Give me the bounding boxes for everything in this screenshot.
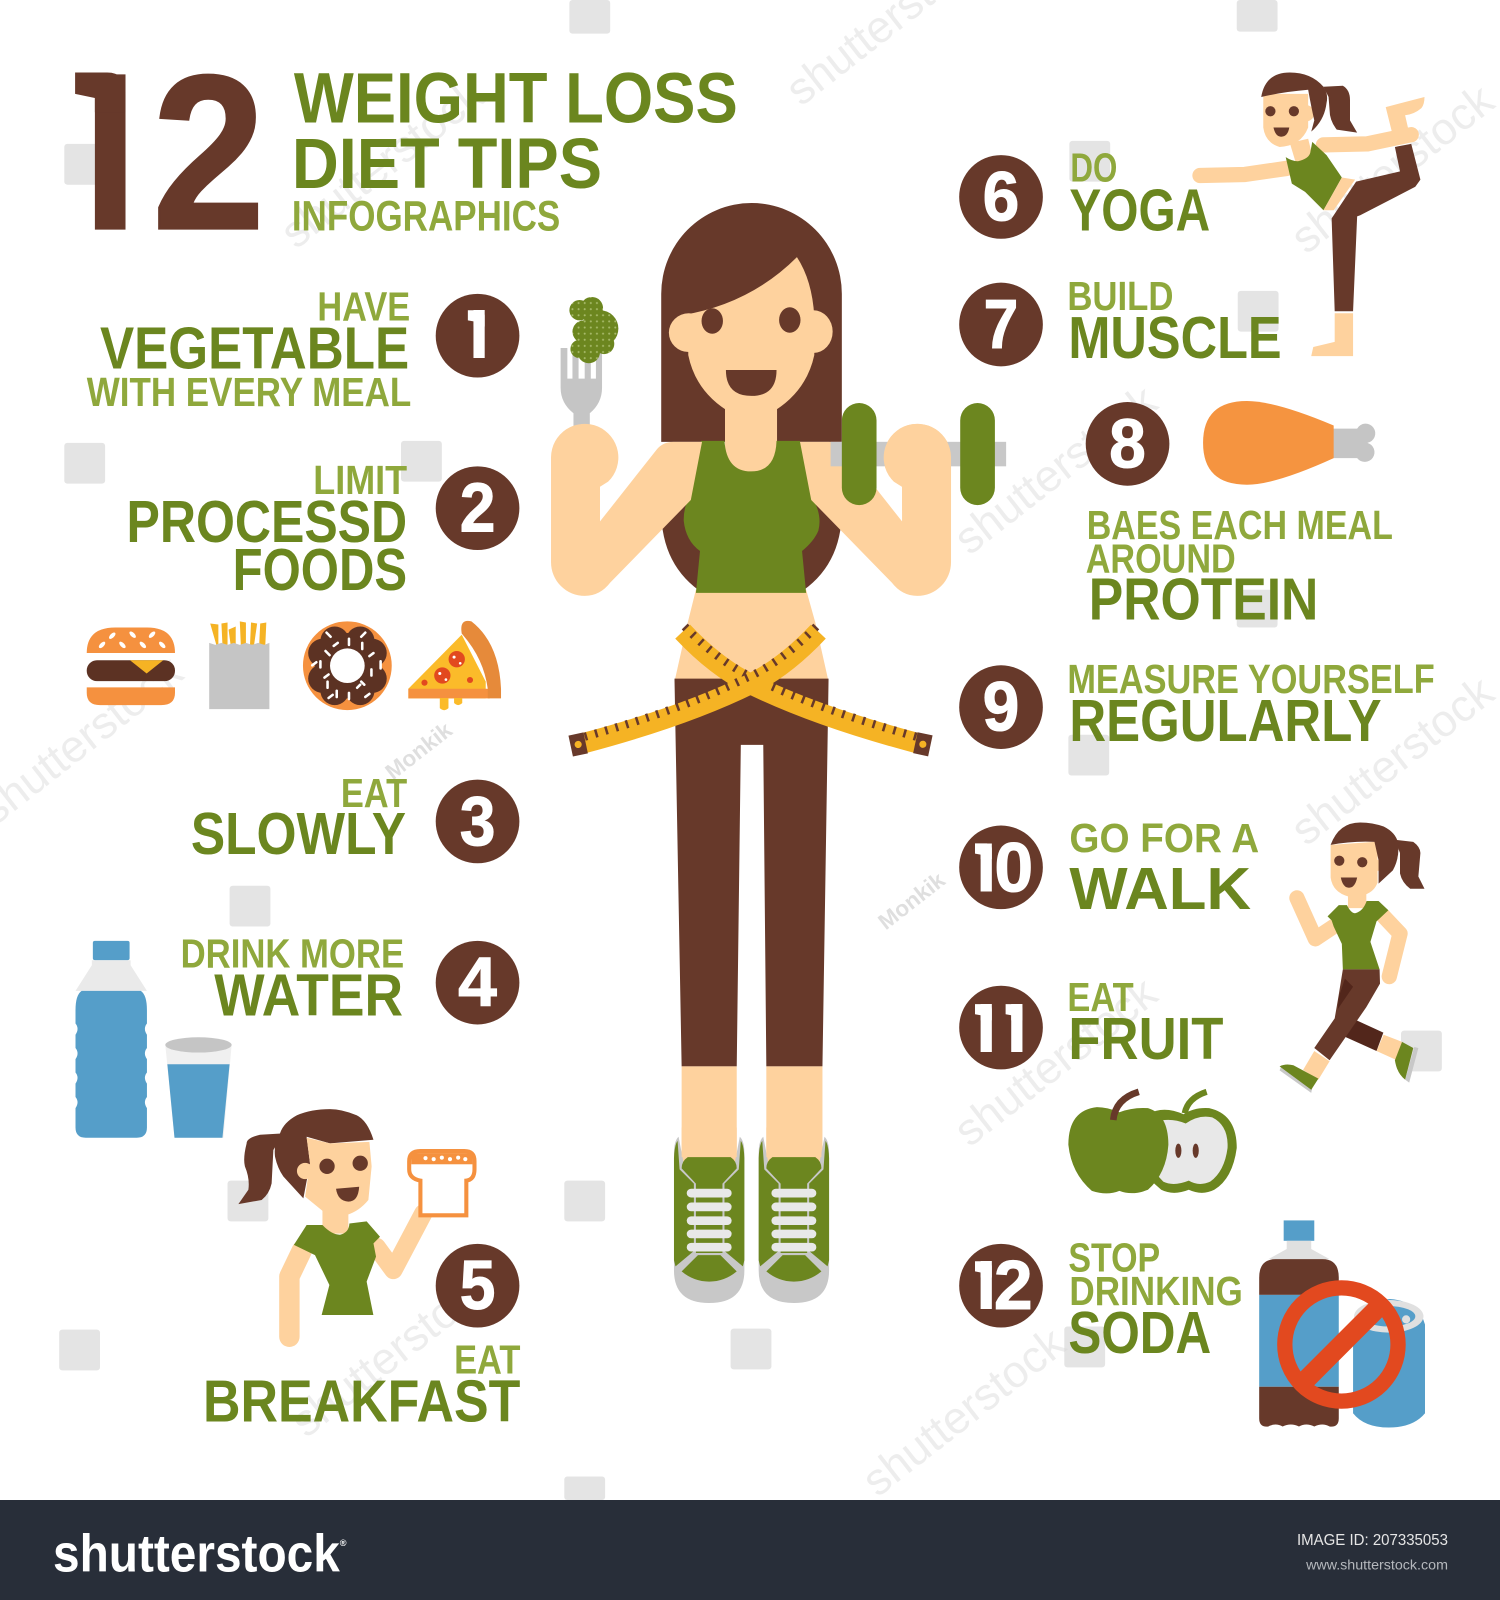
tip 1: have vegetable: HAVE <box>317 283 410 329</box>
left shoe <box>674 1128 744 1303</box>
right shoe <box>759 1128 829 1303</box>
icon: apples <box>1068 1092 1237 1193</box>
face <box>669 257 833 416</box>
tip 5: eat breakfast <box>203 1244 520 1434</box>
left arm <box>551 424 702 596</box>
icon: soda bottle and can <box>1259 1220 1425 1428</box>
tip 1: have vegetable: VEGETABLE <box>100 314 409 381</box>
tip 10: go for a walk: 1 <box>958 828 1010 906</box>
tip 3: eat slowly: 3 <box>460 782 495 860</box>
crop top <box>684 441 820 593</box>
tip 5: eat breakfast: EAT <box>454 1336 520 1382</box>
tip 11: eat fruit: 1 <box>989 989 1041 1067</box>
tip 10: go for a walk: WALK <box>1069 855 1251 922</box>
text: shutterstock <box>852 1316 1075 1506</box>
text: shutterstock <box>1281 74 1500 263</box>
title <box>75 72 736 231</box>
tip 2: limit processed foods: 2 <box>460 469 495 547</box>
dumbbell weights <box>842 403 995 505</box>
tip 3: eat slowly <box>191 770 519 867</box>
fork <box>561 348 602 429</box>
tip 11: eat fruit: 1 <box>958 989 1010 1067</box>
icon: donut <box>303 621 392 710</box>
icon: burger <box>87 628 175 705</box>
site url: www.shutterstock.com <box>1305 1557 1448 1573</box>
title line: diet tips: DIET TIPS <box>292 124 602 204</box>
leggings <box>674 679 829 1066</box>
tip 10: go for a walk: GO FOR A <box>1069 815 1259 861</box>
tip 8: protein: AROUND <box>1086 535 1236 581</box>
icon: prohibition sign <box>1285 1288 1398 1401</box>
footer logo: shutterstock <box>53 1524 340 1583</box>
tip 8: protein: BAES EACH MEAL <box>1087 502 1393 548</box>
central woman figure <box>551 203 1006 1303</box>
tip 12: stop drinking soda <box>959 1243 1241 1354</box>
tip 12: stop drinking soda: 1 <box>958 1246 1010 1324</box>
tip 6: do yoga: YOGA <box>1069 177 1210 244</box>
tip 6: do yoga: 6 <box>983 157 1019 235</box>
measuring tape <box>568 627 933 757</box>
text: Monkik <box>381 717 457 785</box>
tip 2: limit processed foods: FOODS <box>233 536 407 603</box>
hair back <box>661 203 842 594</box>
tip 10: go for a walk: 0 <box>994 828 1033 906</box>
tip 6: do yoga: DO <box>1070 145 1117 191</box>
right arm <box>800 424 951 596</box>
tip 12: stop drinking soda: STOP <box>1068 1234 1160 1280</box>
broccoli <box>569 297 618 363</box>
tip 7: build muscle: BUILD <box>1067 273 1173 319</box>
text: Monkik <box>873 867 950 935</box>
text: shutterstock <box>944 966 1167 1156</box>
tip 4: drink more water: WATER <box>214 961 403 1028</box>
text: shutterstock <box>271 68 493 258</box>
right hand <box>884 424 951 510</box>
eyes and mouth <box>702 307 801 396</box>
icon: pizza <box>408 621 501 710</box>
image id: IMAGE ID: 207335053 <box>1297 1532 1448 1549</box>
tip 8: protein: 8 <box>1109 404 1146 482</box>
title number 12: 2 <box>152 29 265 276</box>
neck <box>725 398 777 480</box>
subtitle: infographics: INFOGRAPHICS <box>292 193 560 241</box>
tip 12: stop drinking soda: DRINKING <box>1069 1268 1243 1314</box>
tip 9: measure yourself regularly: 9 <box>983 668 1019 746</box>
tip 7: build muscle: 7 <box>984 285 1018 363</box>
registered mark: ® <box>340 1538 347 1548</box>
tip 5: eat breakfast: BREAKFAST <box>203 1367 520 1434</box>
tip 8: protein: PROTEIN <box>1089 565 1318 632</box>
illustration: running girl <box>1280 822 1424 1093</box>
tip 1: have vegetable <box>86 292 520 406</box>
tip 9: measure yourself regularly: REGULARLY <box>1069 687 1382 754</box>
footer banner <box>0 1500 1500 1600</box>
tip 4: drink more water: DRINK MORE <box>181 930 404 976</box>
icon: water glass <box>165 1037 232 1138</box>
tip 9: measure yourself regularly <box>959 656 1435 754</box>
tip 3: eat slowly: EAT <box>341 770 407 816</box>
tip 2: limit processed foods: PROCESSD <box>127 488 407 555</box>
icon: water bottle <box>76 941 147 1138</box>
tip 12: stop drinking soda: 2 <box>994 1246 1033 1324</box>
tip 4: drink more water <box>181 930 519 1028</box>
tip 2: limit processed foods: LIMIT <box>313 457 407 503</box>
text: shutterstock <box>1281 665 1500 855</box>
tip 12: stop drinking soda: SODA <box>1068 1299 1211 1366</box>
text: shutterstock <box>944 375 1167 564</box>
tip 7: build muscle <box>959 273 1282 371</box>
tip 9: measure yourself regularly: MEASURE YOURSELF <box>1067 656 1435 702</box>
illustration: girl eating breakfast <box>238 1109 474 1337</box>
illustration: yoga girl <box>1200 72 1424 356</box>
tip 4: drink more water: 4 <box>458 943 497 1021</box>
title number 12: 1 <box>32 26 177 278</box>
tip 2: limit processed foods <box>127 457 519 603</box>
icon: chicken drumstick <box>1203 401 1375 485</box>
title number 12 <box>75 72 258 230</box>
waist <box>674 590 829 682</box>
tip 8: protein <box>1086 402 1393 632</box>
tip 1: have vegetable: 1 <box>451 295 503 373</box>
tip 1: have vegetable: WITH EVERY MEAL <box>87 369 411 415</box>
tip 5: eat breakfast: 5 <box>460 1246 495 1324</box>
tip 11: eat fruit: EAT <box>1067 974 1134 1020</box>
tip 11: eat fruit <box>959 983 1223 1070</box>
text: shutterstock <box>281 1257 503 1447</box>
tip 10: go for a walk <box>959 824 1258 910</box>
tip 11: eat fruit: FRUIT <box>1068 1005 1223 1072</box>
icon: fries <box>209 621 269 709</box>
tip 6: do yoga <box>959 145 1210 244</box>
calves <box>682 1066 822 1173</box>
dumbbell bar <box>831 442 1006 466</box>
tip 7: build muscle: MUSCLE <box>1068 304 1282 371</box>
tip 3: eat slowly: SLOWLY <box>191 800 406 867</box>
title line: weight loss: WEIGHT LOSS <box>294 58 738 138</box>
